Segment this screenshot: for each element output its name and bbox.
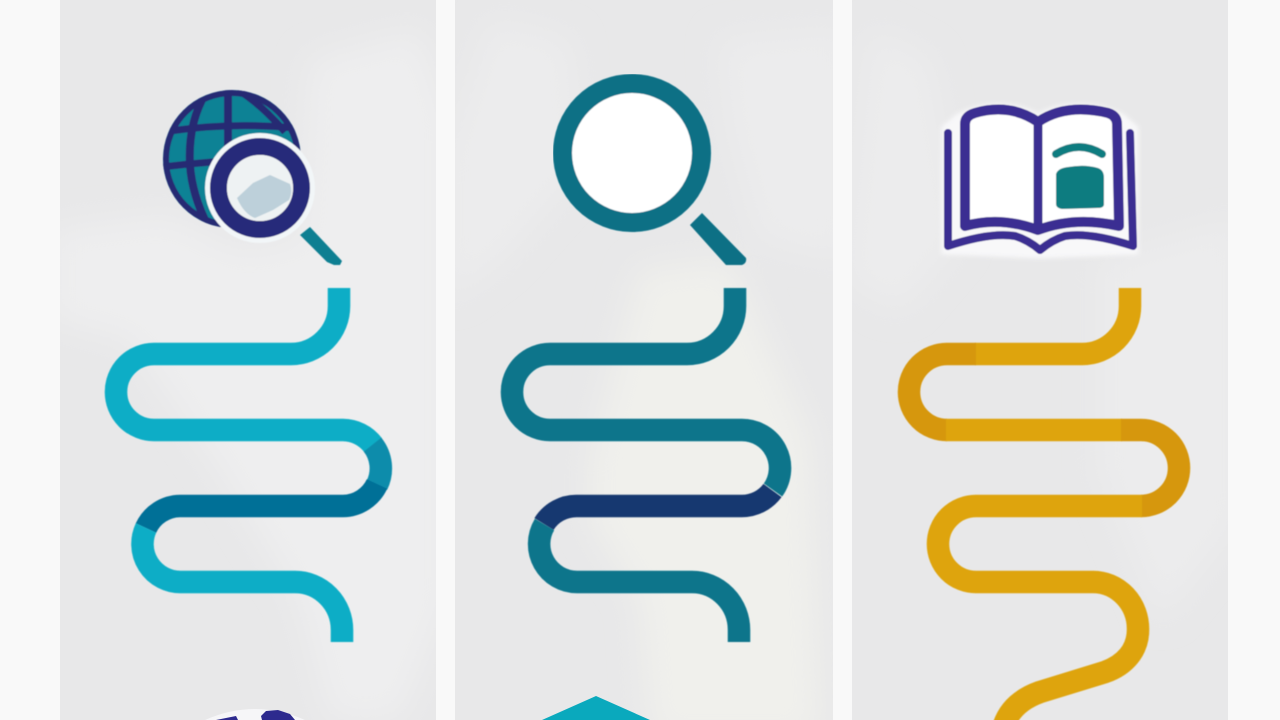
icon: globe top, cropped by edge xyxy=(205,709,305,720)
handle xyxy=(690,213,746,265)
panel: right column background xyxy=(845,0,1240,720)
pages xyxy=(948,110,1133,250)
book halo xyxy=(944,106,1136,256)
arc on right page xyxy=(1056,147,1102,154)
pathway: teal winding line xyxy=(512,288,780,642)
panel: middle column background xyxy=(445,0,850,720)
pathway: cyan winding line xyxy=(116,288,381,642)
panel: left column background xyxy=(50,0,450,720)
block on right page xyxy=(1056,166,1104,209)
icon: globe with magnifying glass xyxy=(160,88,342,265)
icon: teal hexagon top, cropped by edge xyxy=(542,696,650,720)
icon: open book xyxy=(944,106,1136,256)
pathway: golden winding line xyxy=(909,288,1179,720)
lens xyxy=(562,84,702,222)
magnifier lens xyxy=(205,133,315,243)
icon: large magnifying glass xyxy=(562,84,746,265)
globe xyxy=(160,88,301,234)
magnifier handle xyxy=(300,227,342,265)
